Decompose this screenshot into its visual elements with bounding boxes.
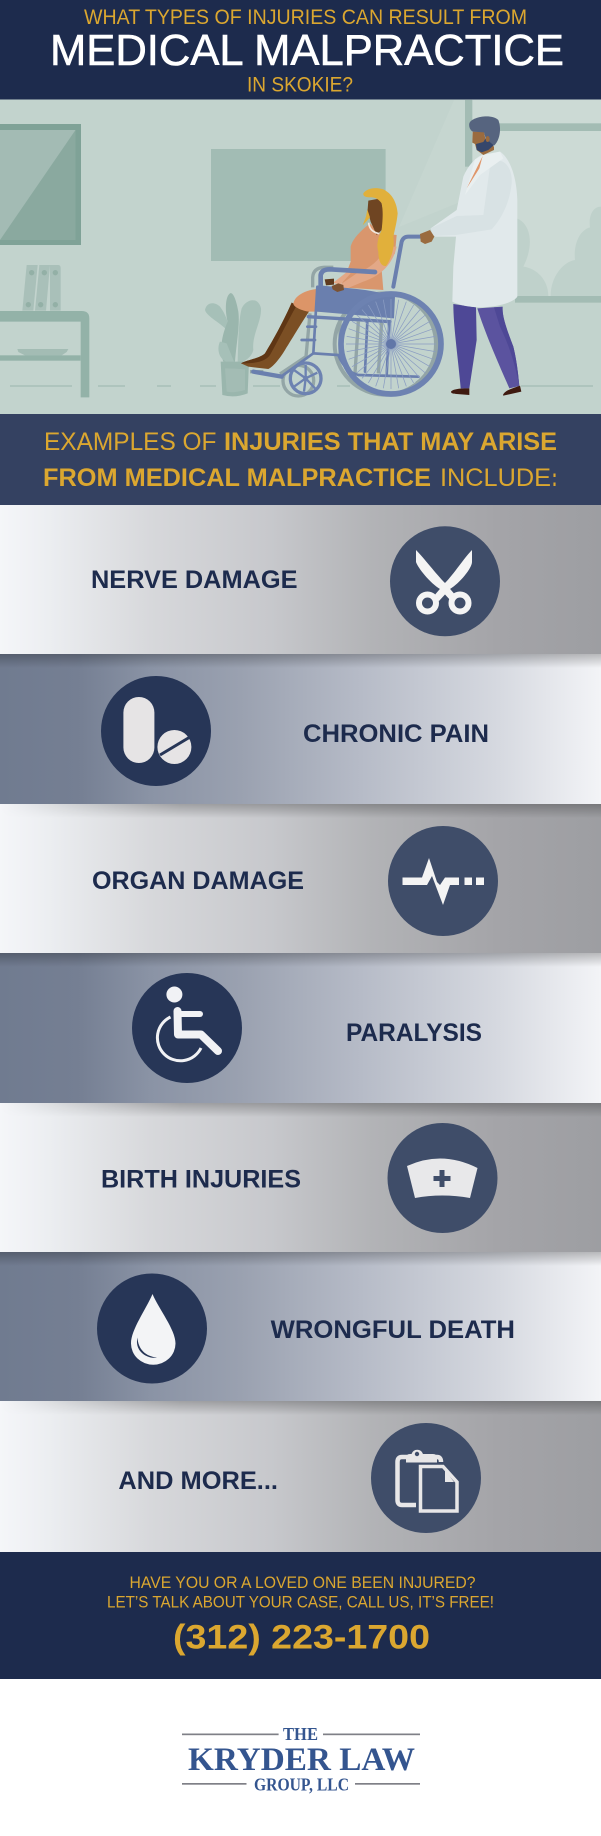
panel: paralysis — [0, 953, 601, 1103]
wheelchair frame — [253, 237, 427, 377]
lab coat — [431, 152, 517, 307]
icon: nurse cap — [388, 1123, 498, 1233]
panel: and more — [0, 1401, 601, 1552]
panel: organ damage — [0, 804, 601, 953]
left wall window — [0, 124, 81, 245]
patient in wheelchair — [241, 188, 441, 396]
footer call to action — [0, 1552, 601, 1679]
panel: chronic pain — [0, 654, 601, 804]
question line: HAVE YOU OR A LOVED ONE BEEN INJURED? — [130, 1573, 476, 1592]
hand on handle — [420, 230, 434, 244]
subheading line 1: INJURIES THAT MAY ARISE — [224, 428, 557, 456]
subheading panel — [0, 414, 601, 505]
label: NERVE DAMAGE — [91, 566, 298, 594]
panel: wrongful death — [0, 1252, 601, 1401]
label: PARALYSIS — [346, 1019, 482, 1047]
phone number: (312) 223-1700 — [173, 1618, 430, 1656]
wall panel — [211, 149, 386, 261]
subheading line 2: : — [552, 464, 557, 492]
logo: GROUP, LLC — [254, 1774, 349, 1794]
window and bushes — [465, 100, 601, 303]
small wheel — [290, 363, 321, 394]
panel: nerve damage — [0, 505, 601, 654]
heading: question intro: WHAT TYPES OF INJURIES CAN RESULT FROM — [84, 5, 527, 29]
header banner — [0, 0, 601, 100]
label: ORGAN DAMAGE — [92, 867, 304, 895]
icon: wheelchair — [132, 973, 242, 1083]
label: CHRONIC PAIN — [303, 720, 489, 748]
invitation line: LET’S TALK ABOUT YOUR CASE, CALL US, IT’S FREE! — [107, 1592, 494, 1612]
head — [469, 116, 500, 155]
illustration: hospital room with doctor and patient in wheelchair — [0, 100, 601, 414]
label: WRONGFUL DEATH — [271, 1316, 515, 1344]
logo: KRYDER LAW — [188, 1742, 415, 1778]
doctor — [420, 116, 521, 396]
icon: heartbeat — [388, 826, 498, 936]
subheading line 1: EXAMPLES OF — [44, 428, 216, 456]
wheelchair seat — [317, 285, 395, 318]
title: MEDICAL MALPRACTICE — [50, 27, 564, 75]
subheading line 2: INCLUDE — [440, 464, 551, 492]
wheelchair shadow — [250, 267, 436, 396]
large wheel — [341, 294, 441, 394]
logo: THE — [283, 1724, 318, 1744]
panel: birth injuries — [0, 1103, 601, 1252]
potted plant — [205, 293, 261, 396]
subheading line 2: FROM MEDICAL MALPRACTICE — [43, 464, 431, 492]
logo — [182, 1724, 420, 1794]
woman's boots and dress — [241, 223, 397, 369]
icon: pills — [101, 676, 211, 786]
woman's hand, face and hair — [332, 188, 398, 292]
icon: droplet — [97, 1274, 207, 1384]
label: BIRTH INJURIES — [101, 1166, 301, 1194]
trousers and shoes — [451, 304, 521, 396]
floor line — [10, 385, 593, 387]
label: AND MORE... — [118, 1467, 278, 1495]
icon: clipboard — [371, 1423, 481, 1533]
subheading line 1 — [44, 428, 557, 456]
heading: location: IN SKOKIE? — [247, 74, 353, 96]
shelf with binders and plate — [0, 265, 89, 397]
icon: scissors — [390, 526, 500, 636]
